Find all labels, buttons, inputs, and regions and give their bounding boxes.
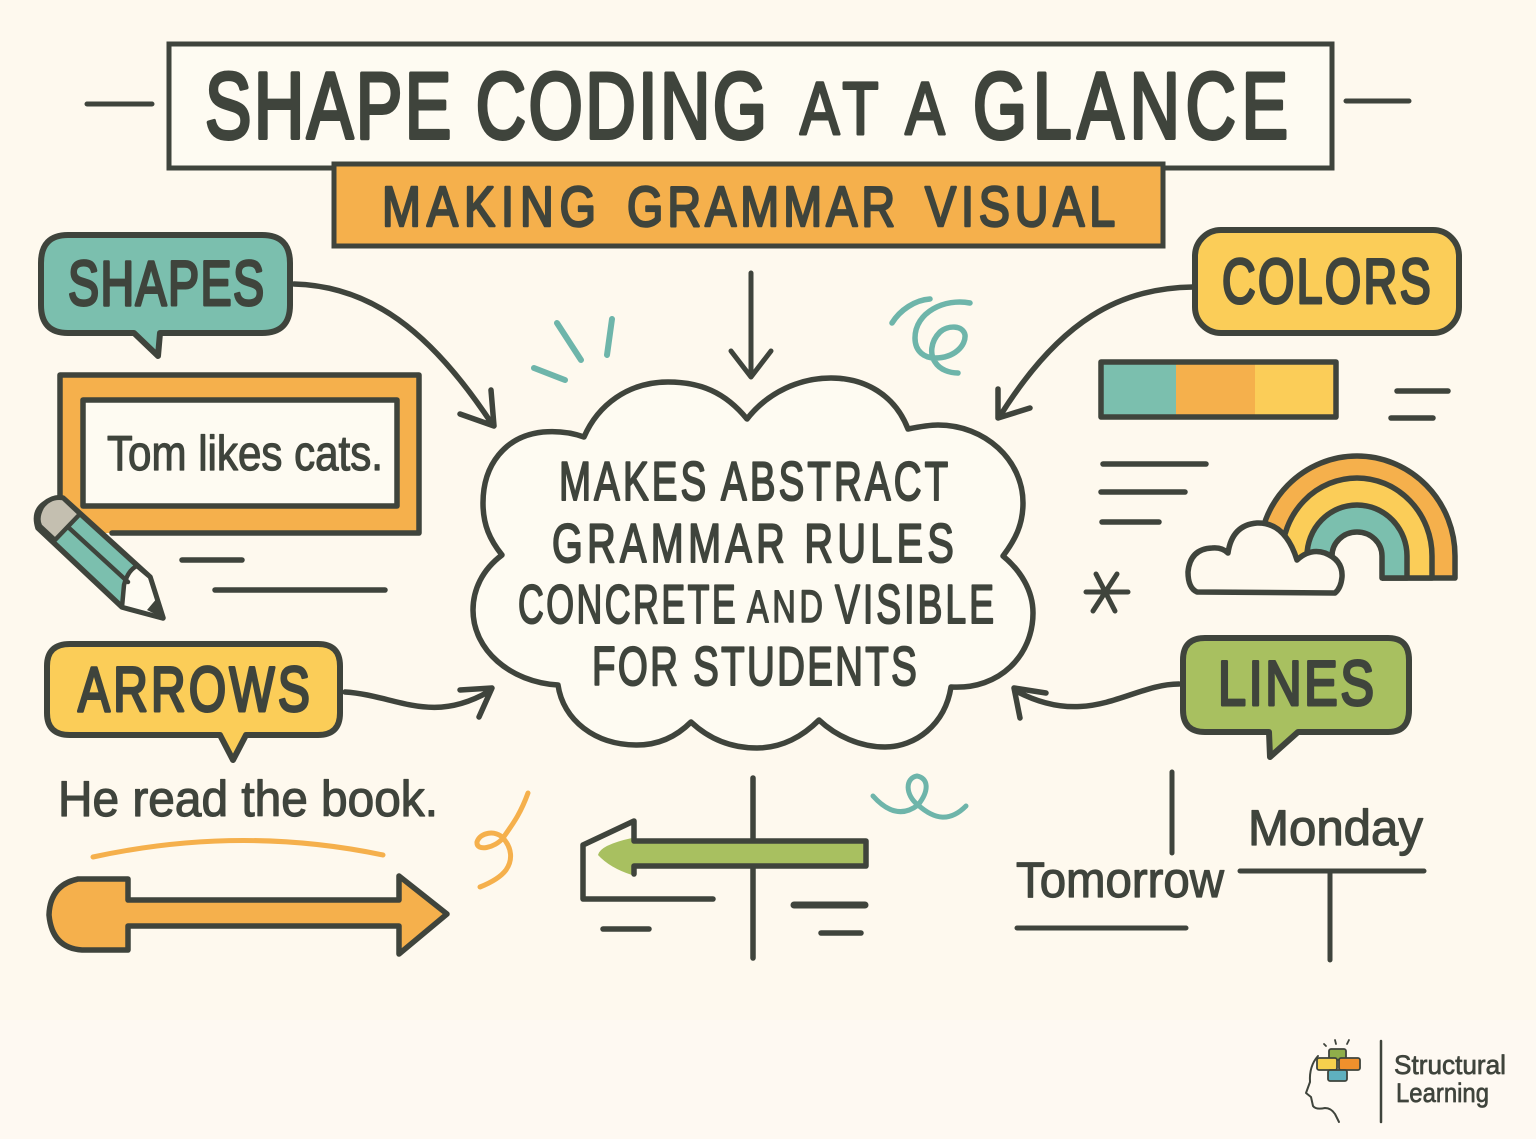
example: sentence in a box [60,375,419,533]
colour bar [1101,362,1336,417]
panel: arrows [47,644,528,954]
subtitle banner: GRAMMAR [627,176,895,239]
title [87,44,1409,168]
central cloud: MAKES ABSTRACT [559,451,948,513]
divider [1380,1041,1382,1122]
teal swirl [892,299,970,373]
orange squiggle [477,793,528,887]
wordmark: Learning [1396,1078,1489,1108]
icon: asterisk [1086,574,1128,611]
title: SHAPE CODING [205,53,767,158]
wordmark: Structural [1394,1050,1506,1080]
lines label bubble: LINES [1218,649,1374,719]
colors label [1195,230,1459,333]
shapes label bubble: SHAPES [68,248,264,319]
arrow: colors to cloud [998,287,1193,418]
lines label bubble [1183,638,1409,757]
arrow: arrows to cloud [345,688,492,717]
teal loop [873,776,966,817]
subtitle banner: MAKING [382,176,596,239]
central cloud [473,378,1033,748]
title: AT A [800,68,945,151]
subtitle banner: VISUAL [925,176,1115,239]
arrow: top to cloud [731,273,771,377]
wordmark [1394,1050,1506,1108]
panel: shapes [36,235,494,618]
icon: rainbow and cloud [1188,456,1455,593]
shapes label bubble [41,235,290,356]
central cloud: FOR STUDENTS [592,636,917,698]
title: GLANCE [973,53,1288,158]
green arrow crossing line [583,778,867,958]
decorative lines [182,560,385,590]
icon: head with blocks [1306,1040,1360,1122]
colors label: COLORS [1222,246,1431,317]
orange arrow [49,876,447,954]
panel: lines [583,638,1424,960]
example sentence: He read the book. [58,771,438,827]
logo: Structural Learning [1306,1040,1506,1122]
orange underline [93,840,383,857]
timeline: Monday [1248,800,1423,856]
central cloud: VISIBLE [835,573,994,635]
arrows label bubble: ARROWS [78,654,310,725]
example: sentence in a box: Tom likes cats. [107,427,383,481]
icon: pencil [36,498,163,618]
arrow: lines to cloud [1014,684,1179,718]
decorative lines [1101,391,1448,522]
central cloud: GRAMMAR RULES [552,514,954,575]
panel: colors [998,230,1459,611]
timeline: Tomorrow [1016,852,1225,908]
teal spark marks [534,319,612,380]
arrow: shapes to cloud [294,284,494,426]
central cloud: AND [747,583,823,632]
subtitle banner [334,164,1163,246]
central cloud: CONCRETE [518,573,736,635]
arrows label bubble [47,644,340,760]
timeline [1016,772,1424,960]
